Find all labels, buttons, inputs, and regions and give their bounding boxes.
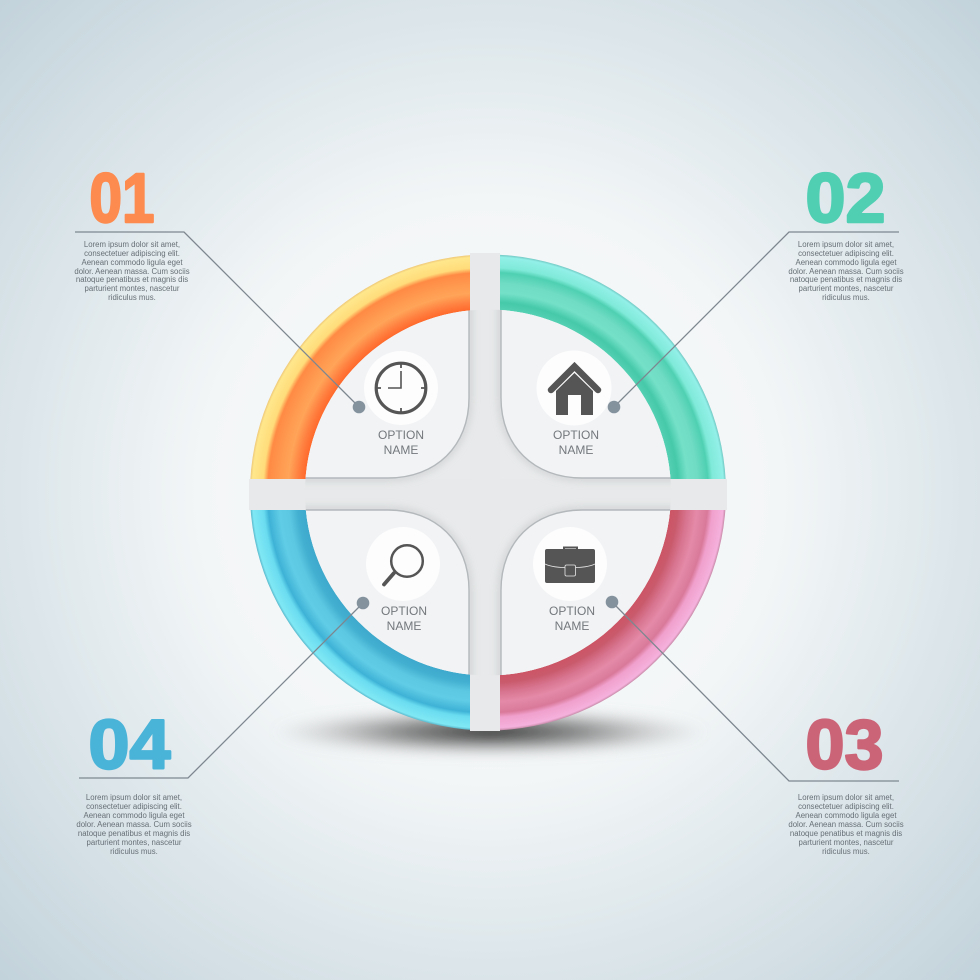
description 04: ridiculus mus.: [110, 847, 158, 856]
inner disc: [305, 310, 671, 676]
icon: clock: [376, 363, 426, 413]
option label 02: [553, 428, 599, 457]
description 02: Lorem ipsum dolor sit amet,: [798, 240, 894, 249]
cross: vertical bar: [470, 253, 500, 731]
description 04: Aenean commodo ligula eget: [84, 811, 185, 820]
option label 02: NAME: [559, 443, 593, 457]
description 04: [76, 793, 192, 856]
description 03: [788, 793, 904, 856]
option label 01: OPTION: [378, 428, 424, 442]
description 01: ridiculus mus.: [108, 293, 156, 302]
leader line 03: [612, 602, 899, 781]
connector dot 04: [357, 597, 369, 609]
description 03: consectetuer adipiscing elit.: [798, 802, 894, 811]
petal shadows: [306, 310, 670, 675]
option label 04: OPTION: [381, 604, 427, 618]
description 01: [74, 240, 190, 302]
leader line 02: [614, 232, 899, 407]
number 04: 04: [88, 706, 171, 784]
leader line 01: [75, 232, 359, 407]
number 02: 02: [806, 159, 886, 237]
ring diagram: [249, 253, 727, 731]
description 03: Lorem ipsum dolor sit amet,: [798, 793, 894, 802]
petal panels: [306, 310, 670, 675]
description 03: parturient montes, nascetur: [799, 838, 894, 847]
description 03: dolor. Aenean massa. Cum sociis: [788, 820, 904, 829]
description 02: natoque penatibus et magnis dis: [790, 275, 902, 284]
option 03: [533, 527, 904, 856]
connector dot 01: [353, 401, 365, 413]
description 04: natoque penatibus et magnis dis: [78, 829, 190, 838]
icon: magnifier: [384, 545, 423, 584]
ring segment: blue: [250, 492, 488, 730]
description 01: dolor. Aenean massa. Cum sociis: [74, 267, 190, 276]
number 01: 01: [90, 159, 154, 237]
description 02: consectetuer adipiscing elit.: [798, 249, 894, 258]
description 01: natoque penatibus et magnis dis: [76, 275, 188, 284]
description 01: consectetuer adipiscing elit.: [84, 249, 180, 258]
connector dot 02: [608, 401, 620, 413]
description 03: ridiculus mus.: [822, 847, 870, 856]
description 02: [788, 240, 904, 302]
leader line 04: [79, 603, 363, 778]
cross: horizontal bar: [249, 479, 727, 510]
ring segment: pink: [488, 492, 726, 730]
panel: top right: [500, 310, 670, 479]
description 03: Aenean commodo ligula eget: [796, 811, 897, 820]
option label 03: NAME: [555, 619, 589, 633]
option 04: [76, 527, 440, 856]
description 02: dolor. Aenean massa. Cum sociis: [788, 267, 904, 276]
description 04: parturient montes, nascetur: [87, 838, 182, 847]
option 02: [536, 159, 904, 457]
description 04: Lorem ipsum dolor sit amet,: [86, 793, 182, 802]
option label 01: [378, 428, 424, 457]
number 03: 03: [806, 706, 884, 784]
description 02: ridiculus mus.: [822, 293, 870, 302]
option 01: [74, 159, 438, 457]
ring segment: teal: [488, 254, 726, 492]
panel: top left: [306, 310, 470, 479]
panel: bottom left: [306, 509, 470, 674]
icon: briefcase: [545, 548, 595, 583]
panel: bottom right: [500, 509, 670, 675]
description 03: natoque penatibus et magnis dis: [790, 829, 902, 838]
description 01: Lorem ipsum dolor sit amet,: [84, 240, 180, 249]
description 02: parturient montes, nascetur: [799, 284, 894, 293]
ring segment: orange: [250, 254, 488, 492]
description 01: Aenean commodo ligula eget: [82, 258, 183, 267]
option label 04: NAME: [387, 619, 421, 633]
option label 03: [549, 604, 595, 633]
icon: house: [551, 366, 598, 415]
description 01: parturient montes, nascetur: [85, 284, 180, 293]
description 04: consectetuer adipiscing elit.: [86, 802, 182, 811]
description 02: Aenean commodo ligula eget: [796, 258, 897, 267]
option label 01: NAME: [384, 443, 418, 457]
icon badge 04: [366, 527, 440, 601]
description 04: dolor. Aenean massa. Cum sociis: [76, 820, 192, 829]
ground shadow: [272, 708, 708, 756]
icon badge 01: [364, 351, 438, 425]
icon badge 03: [533, 527, 607, 601]
option label 04: [381, 604, 427, 633]
option label 03: OPTION: [549, 604, 595, 618]
connector dot 03: [606, 596, 618, 608]
icon badge 02: [536, 350, 612, 426]
option label 02: OPTION: [553, 428, 599, 442]
